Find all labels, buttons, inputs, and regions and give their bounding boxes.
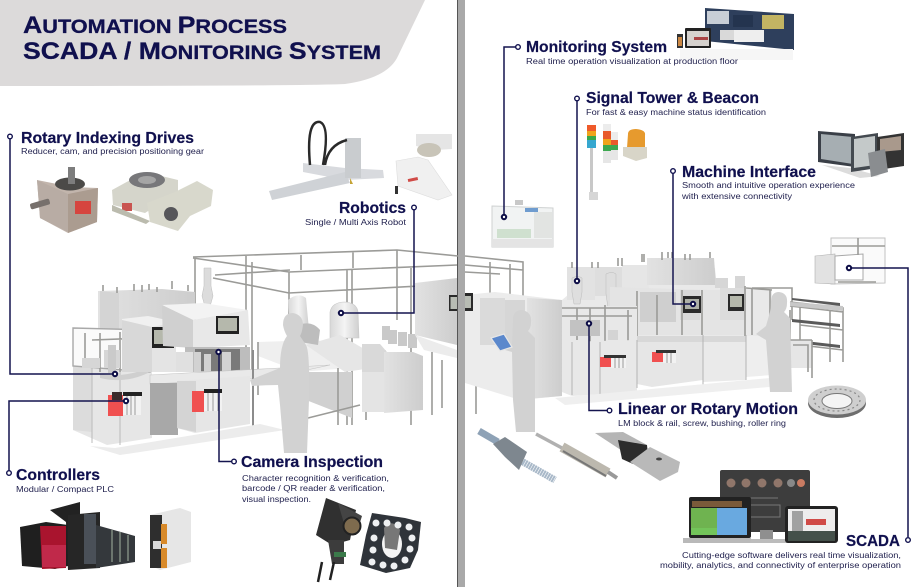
description: Modular / Compact PLC (16, 485, 114, 494)
callout: Machine Interface (671, 164, 856, 306)
metal overhead frame (193, 250, 458, 430)
machine backing (562, 268, 772, 336)
description: Cutting-edge software delivers real time visualization, (682, 551, 901, 560)
monitor (449, 295, 457, 311)
heading: SCADA (846, 533, 900, 550)
long conveyor table (150, 365, 330, 384)
description: visual inspection. (242, 495, 311, 504)
work table right (258, 323, 392, 425)
callout: Linear or Rotary Motion (587, 321, 798, 428)
glass station machine (562, 305, 637, 342)
middle cabinet with HMI (122, 316, 176, 372)
title line 1: AUTOMATION PROCESS (23, 12, 287, 39)
back cabinets (98, 281, 195, 345)
title line 2: SCADA / M ONITORING SYSTEM (23, 38, 381, 65)
tall rear enclosures (567, 252, 745, 300)
description: Character recognition & verification, (242, 474, 389, 483)
heading: Controllers (16, 467, 100, 484)
worker with tablet (491, 310, 535, 432)
tall cabinet block (465, 292, 562, 400)
worker silhouette (250, 313, 309, 453)
heading: Rotary Indexing Drives (21, 130, 194, 147)
product: robots (269, 122, 452, 200)
PLC unit 1 (108, 392, 142, 416)
right frame end (465, 256, 523, 414)
product: ball screw, shaft, LM rail (479, 431, 680, 481)
center divider (457, 0, 465, 587)
description: mobility, analytics, and connectivity of enterprise operation (660, 561, 901, 570)
product: SCADA workstation sketch (815, 238, 885, 284)
product: machine interface panels (818, 131, 904, 178)
tablet (491, 334, 512, 351)
callout: SCADA (660, 266, 910, 570)
product: monitoring HMI on stand (492, 200, 553, 247)
machinery: right line (465, 252, 843, 432)
heading: Machine Interface (682, 164, 816, 181)
PLC units (600, 350, 676, 368)
enclosed stations (610, 286, 772, 340)
machinery: left line (73, 250, 458, 455)
signal beacons on machine (572, 272, 616, 308)
callout: Camera Inspection (216, 350, 389, 504)
product: signal towers and beacon (587, 124, 647, 200)
description: For fast & easy machine status identification (586, 108, 766, 117)
description: LM block & rail, screw, bushing, roller ring (618, 419, 786, 428)
description: barcode / QR reader & verification, (242, 484, 385, 493)
callout: Rotary Indexing Drives (8, 130, 204, 376)
robot dome rear (288, 295, 309, 330)
lower cabinet with PLC (150, 350, 254, 435)
large upper box with HMI (162, 303, 250, 374)
description: Single / Multi Axis Robot (305, 218, 407, 227)
callout: Signal Tower & Beacon (575, 90, 766, 283)
callout: Controllers (7, 399, 128, 494)
heading: Linear or Rotary Motion (618, 401, 798, 418)
beacon on frame (202, 268, 213, 310)
description: Reducer, cam, and precision positioning gear (21, 147, 204, 156)
worker standing (756, 292, 792, 392)
description: Smooth and intuitive operation experience (682, 181, 856, 190)
description: Real time operation visualization at production floor (526, 57, 738, 66)
small frame near person (752, 288, 792, 335)
product: controllers PLC (20, 502, 191, 570)
lower cabinets right (362, 326, 457, 415)
back wall module (415, 278, 457, 345)
monitor (465, 293, 473, 311)
glass station cabinet (73, 328, 152, 445)
floor shadow (555, 378, 780, 405)
product: monitoring screens (677, 8, 794, 60)
description: with extensive connectivity (681, 192, 792, 201)
product: SCADA devices (683, 470, 838, 543)
product: roller ring (808, 386, 866, 418)
storage rack (790, 298, 843, 378)
heading: Camera Inspection (241, 454, 383, 471)
robot dome front (330, 302, 359, 338)
floor shadow (90, 424, 285, 455)
callout: Robotics (305, 200, 416, 315)
product: rotary indexers (30, 167, 213, 233)
heading: Robotics (339, 200, 406, 217)
callout: Monitoring System (502, 39, 738, 219)
heading: Monitoring System (526, 39, 667, 56)
product: vision camera and ring light (316, 498, 421, 582)
lower cabinets row (562, 335, 772, 396)
heading: Signal Tower & Beacon (586, 90, 759, 107)
title banner (0, 0, 425, 86)
